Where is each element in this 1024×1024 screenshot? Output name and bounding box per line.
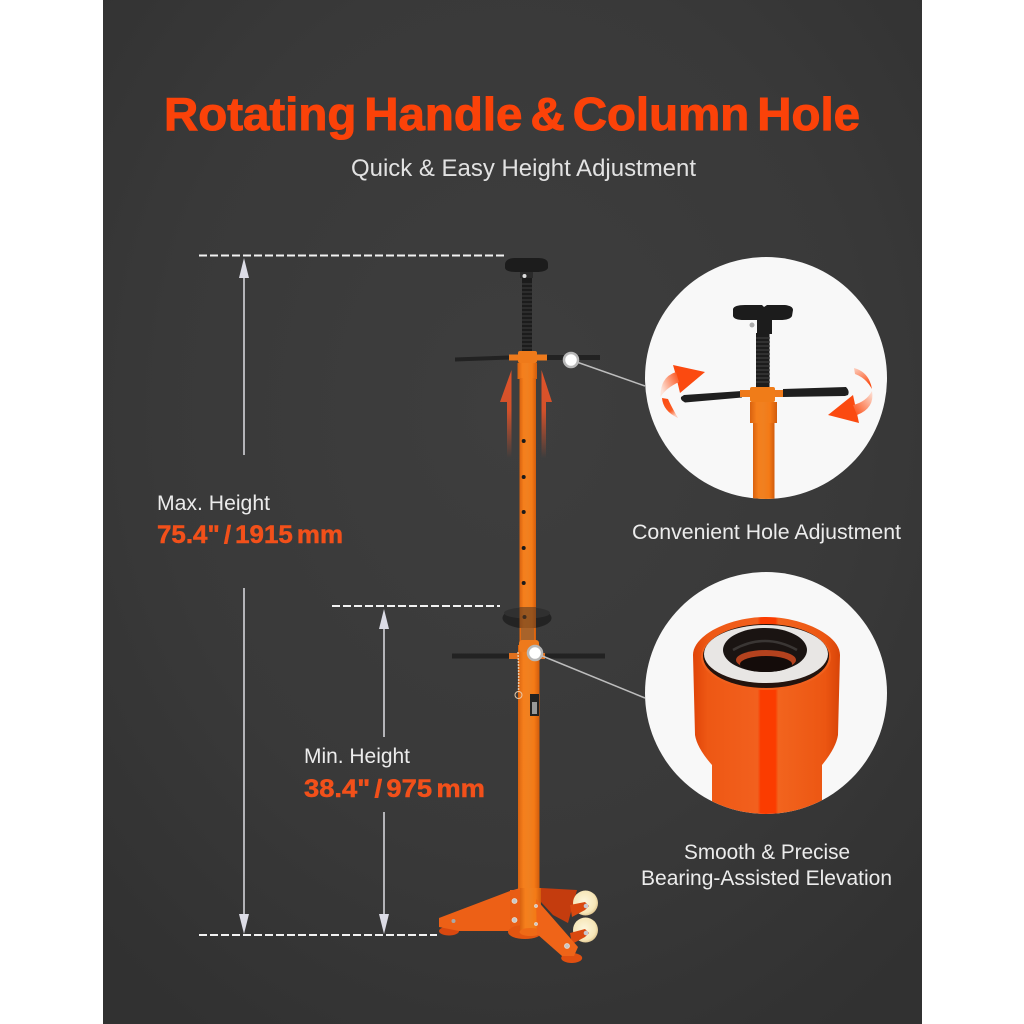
detail screw <box>756 320 772 389</box>
upper sleeve <box>518 363 537 379</box>
chain ring <box>515 692 522 698</box>
circle panel: bearing <box>645 572 887 820</box>
column foot <box>520 888 541 932</box>
base bolts <box>512 898 570 948</box>
hotspot: bearing <box>528 646 542 660</box>
max height label: Max. Height <box>157 492 270 515</box>
max height label <box>157 492 343 549</box>
lowered handle <box>452 653 605 659</box>
detail knob <box>733 305 793 328</box>
subtitle: Quick & Easy Height Adjustment <box>351 155 696 182</box>
wheel arms <box>570 902 589 944</box>
raised knob <box>505 258 548 278</box>
min height label <box>304 745 485 803</box>
min height label: 38.4" / 975 mm <box>304 775 485 803</box>
left base leg <box>439 888 521 936</box>
column holes <box>522 439 526 619</box>
rear wheel bracket <box>541 888 577 923</box>
caption: bearing elevation <box>641 841 892 890</box>
safety chain <box>517 652 520 692</box>
title: Rotating Handle & Column Hole <box>164 88 860 140</box>
leader line: handle <box>571 360 645 386</box>
detail sleeve <box>750 402 777 423</box>
caption: bearing elevation: Bearing-Assisted Elevation <box>641 867 892 890</box>
detail bore <box>723 628 807 672</box>
label plate <box>530 694 539 716</box>
min height label: Min. Height <box>304 745 410 768</box>
caption: hole adjustment: Convenient Hole Adjustment <box>632 521 901 544</box>
detail bearing housing <box>693 617 840 820</box>
raised screw <box>522 278 532 352</box>
hotspot: handle <box>564 353 578 367</box>
right foot pad <box>561 953 582 963</box>
lowered screw overlay <box>521 628 534 642</box>
wheel bolts <box>584 904 588 935</box>
center flange <box>508 925 542 939</box>
min height dimension arrow <box>379 609 389 934</box>
leader line: bearing <box>535 653 645 698</box>
lowered knob (ghost) <box>502 608 552 628</box>
stand product: raised and lowered positions <box>439 258 605 963</box>
circle panel: rotating handle <box>645 257 887 502</box>
dark background panel <box>103 0 922 1024</box>
rotation arrow right <box>828 368 872 423</box>
dashed guide lines <box>199 256 505 935</box>
caption: bearing elevation: Smooth & Precise <box>684 841 850 864</box>
inner column <box>520 378 536 643</box>
max height label: 75.4" / 1915 mm <box>157 521 343 549</box>
max height dimension arrow <box>239 258 249 934</box>
detail bearing seal <box>703 624 829 688</box>
raised handle <box>455 351 600 363</box>
detail handle <box>681 387 849 402</box>
knob overlay on column <box>520 607 536 628</box>
detail bearing rim <box>701 624 831 690</box>
upward motion arrows <box>500 370 552 458</box>
right base leg <box>536 899 578 956</box>
detail column <box>753 420 774 502</box>
rotation arrow left <box>660 365 705 418</box>
detail bearing ring <box>704 625 828 683</box>
wheels <box>573 890 598 942</box>
lower column <box>518 645 540 900</box>
